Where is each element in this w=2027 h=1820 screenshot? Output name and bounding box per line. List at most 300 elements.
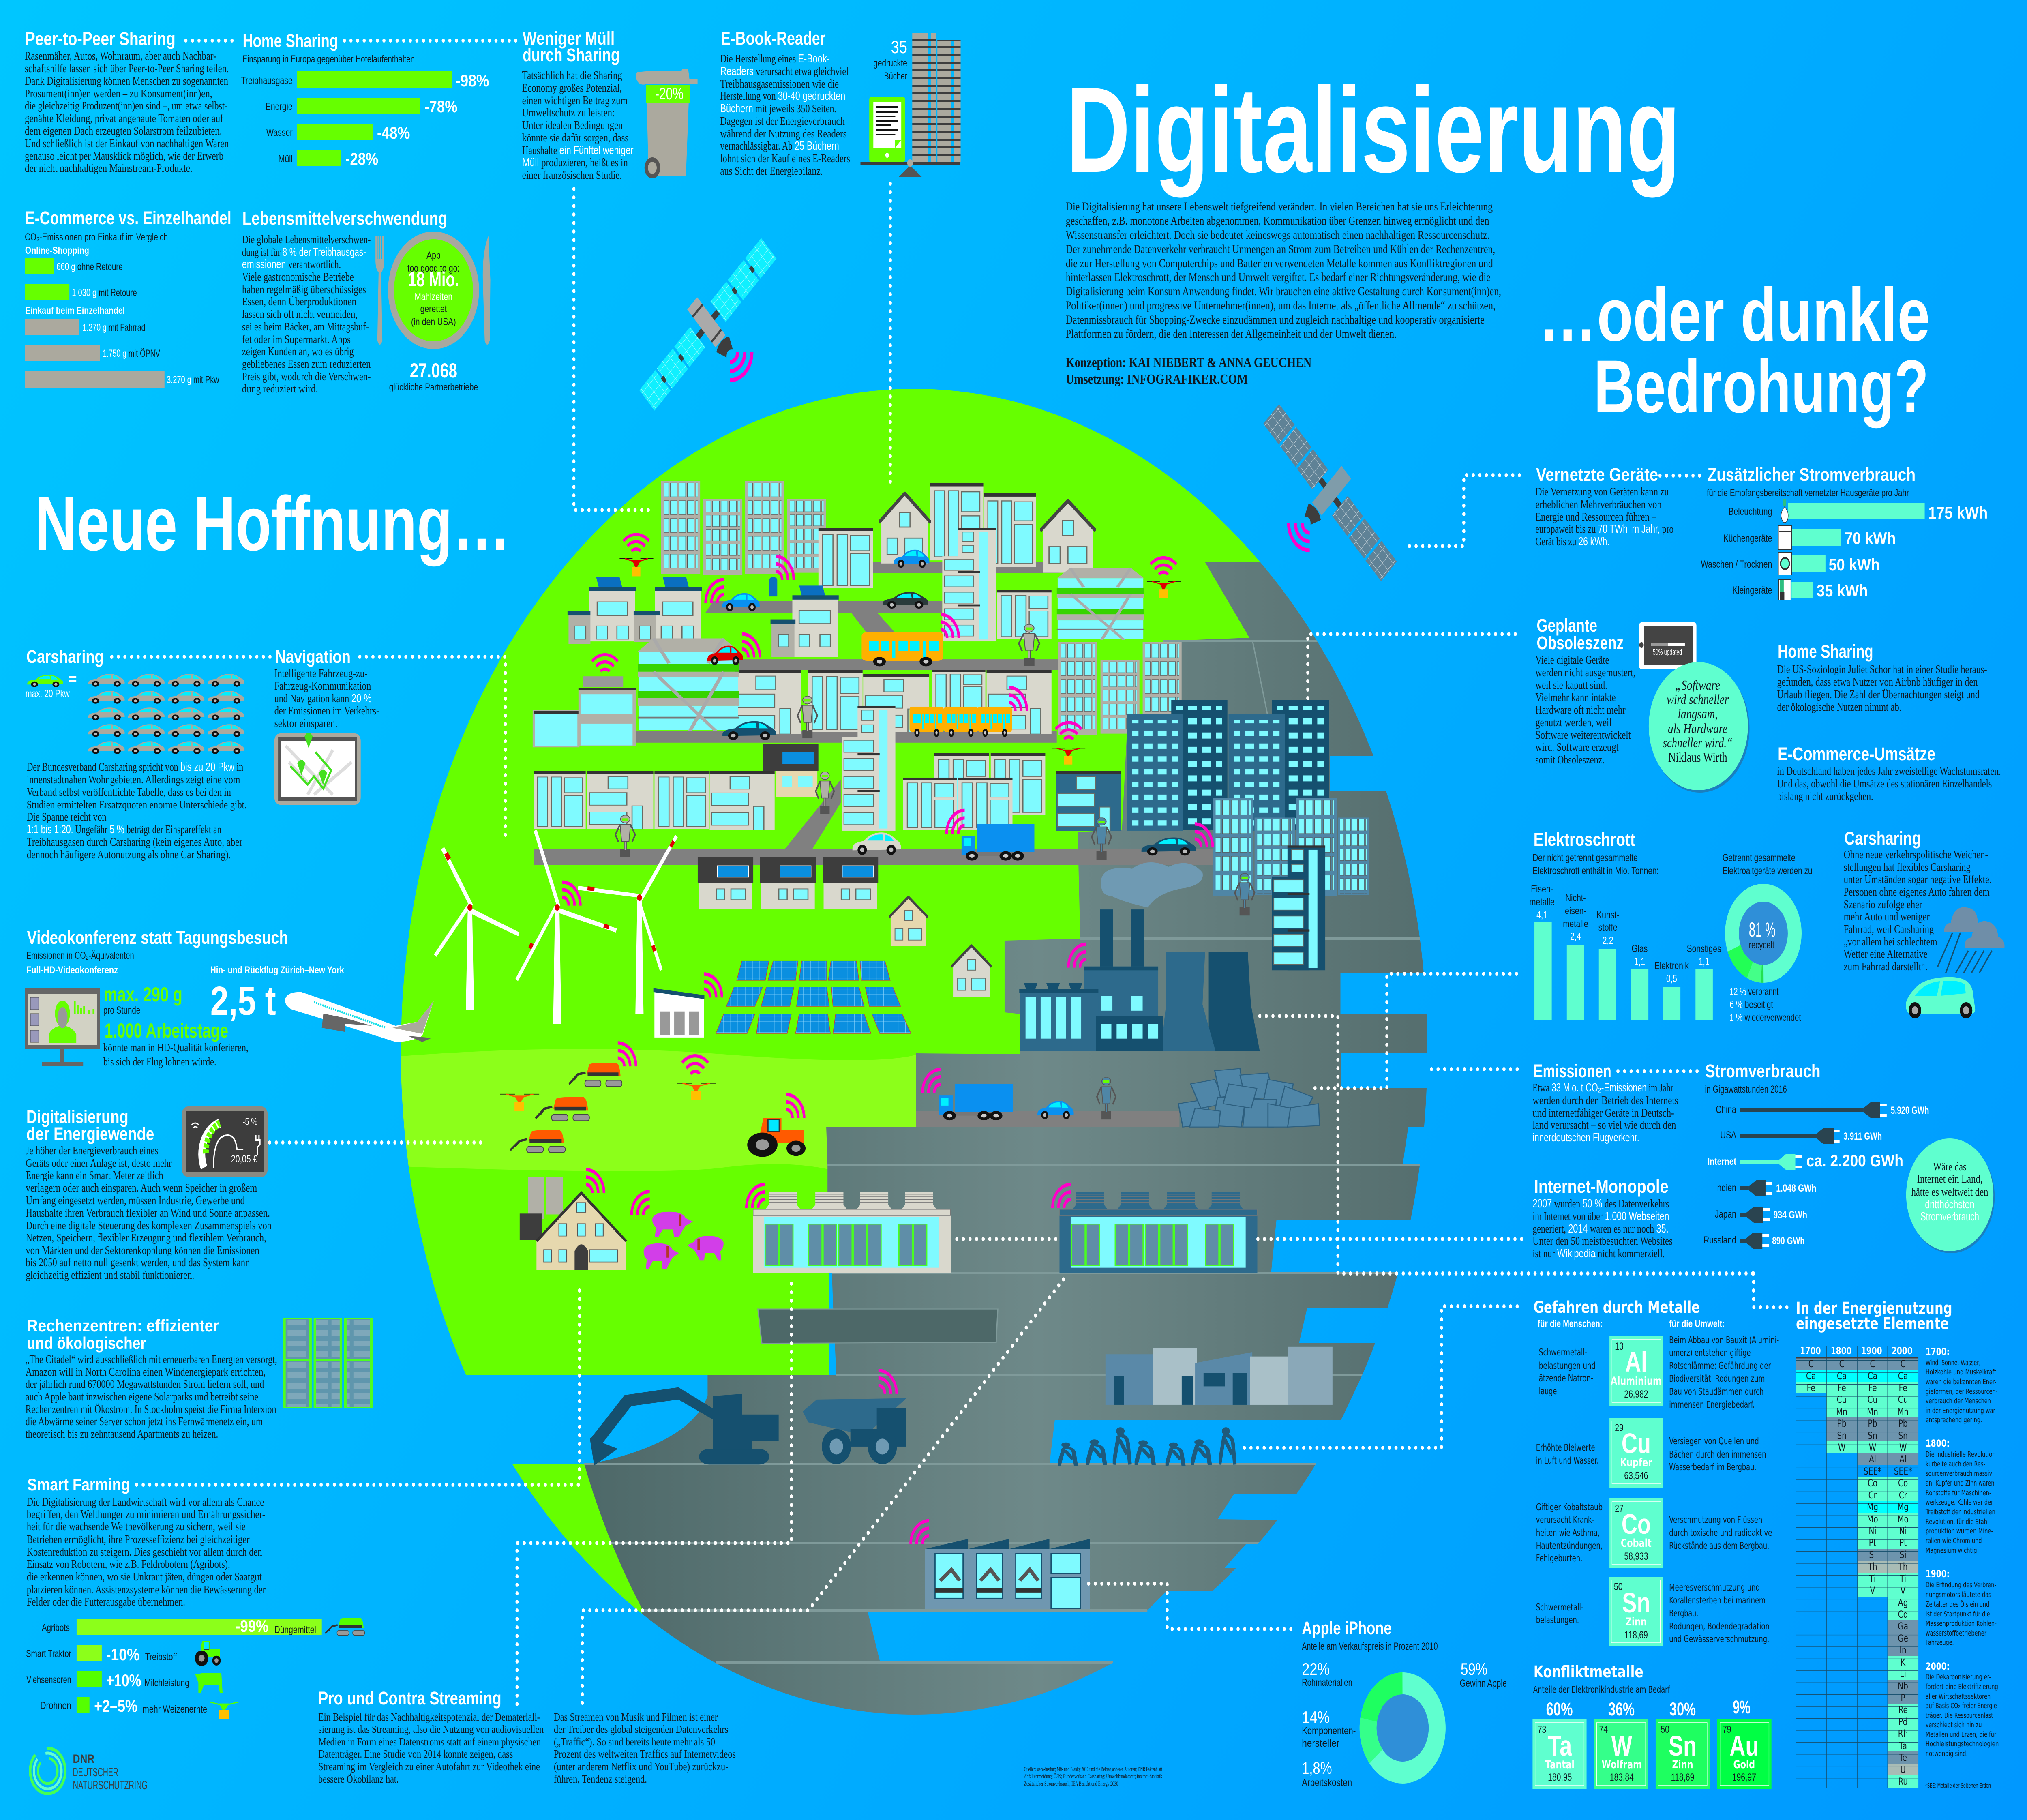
text: era descriptions: Revolution, für die Stahl- xyxy=(1926,1517,1991,1526)
body text: Und das, obwohl die Umsätze des stationären Einzelhandels xyxy=(1777,777,1992,790)
panel: Apple iPhone xyxy=(1302,1618,1507,1788)
table: elements by era: Sn xyxy=(1898,1430,1908,1442)
subtitle: Der nicht getrennt gesammelte xyxy=(1532,852,1638,864)
body text: Müll produzieren, heißt es in xyxy=(522,156,628,169)
text: hazards for environment: Bächen durch den immensen xyxy=(1669,1449,1766,1460)
element cards xyxy=(1609,1336,1663,1646)
body text: auch Apple baut inzwischen eigene Solarparks und betreibt seine xyxy=(26,1391,258,1403)
bar chart: e-waste: 4,1 xyxy=(1536,909,1547,921)
table: elements by era: Pb xyxy=(1837,1418,1847,1430)
bar chart: Energie xyxy=(266,101,293,112)
body text: Haushalte ihren Verbrauch flexibler an Wind und Sonne anpassen. xyxy=(26,1207,270,1220)
body text: dung reduziert wird. xyxy=(242,382,318,395)
text: era descriptions: Hochleistungstechnologien xyxy=(1926,1739,1999,1748)
body text: theoretisch bis zu zehntausend Apartments zu heizen. xyxy=(26,1428,218,1441)
bar chart: emissions xyxy=(25,245,219,388)
text: era descriptions: Fahrzeuge. xyxy=(1926,1638,1954,1646)
chart: electricity cables and plugs: 5.920 GWh xyxy=(1891,1105,1929,1116)
callout: Niklaus Wirth quote: wird schneller xyxy=(1667,692,1729,707)
text: hazards for humans: heiten wie Asthma, xyxy=(1536,1527,1600,1538)
subtitle: CO₂-Emissionen pro Einkauf im Vergleich xyxy=(25,232,168,243)
text: hazards for environment: Meeresverschmutzung und xyxy=(1669,1582,1760,1593)
chart: electricity cables and plugs: Internet xyxy=(1708,1156,1736,1167)
heading: der Energiewende xyxy=(26,1124,154,1144)
heading: Carsharing xyxy=(26,647,104,667)
bar chart: farming savings: +10% xyxy=(106,1671,141,1690)
body text: gebliebenes Essen zum reduzierten xyxy=(242,357,371,371)
text: hazards for environment: Wasserbedarf im Bergbau. xyxy=(1669,1462,1757,1473)
body text: Rechenzentren mit Ökostrom. In Stockholm speist die Firma Interxion xyxy=(26,1404,276,1416)
text: hazards for humans xyxy=(1536,1347,1603,1625)
body text: lohnt sich der Kauf eines E-Readers xyxy=(720,152,850,165)
donut chart: recycling: Getrennt gesammelte xyxy=(1723,852,1796,864)
heading: E-Book-Reader xyxy=(721,28,826,49)
drones xyxy=(619,558,1181,765)
body text: Haushalte ein Fünftel weniger xyxy=(522,144,634,157)
icon: smart meter: 20,05 € xyxy=(231,1153,257,1165)
heading: Navigation xyxy=(275,647,351,667)
icon: one shared car equals twenty cars xyxy=(26,674,244,754)
body text: Etwa 33 Mio. t CO₂-Emissionen im Jahr xyxy=(1532,1081,1673,1094)
body text right: („Traffic“). So sind bereits heute mehr als 50 xyxy=(554,1736,715,1748)
table: elements by era: Sn xyxy=(1868,1430,1877,1442)
callout: Internet as a country: hätte es weltweit den xyxy=(1911,1185,1988,1198)
element cards: 180,95 xyxy=(1548,1772,1572,1783)
table: elements by era: 1800 xyxy=(1831,1346,1851,1357)
body text xyxy=(242,233,371,395)
body text: Die Vernetzung von Geräten kann zu xyxy=(1535,485,1669,498)
callout: Internet as a country: Wäre das xyxy=(1933,1160,1967,1173)
labels: iPhone price shares: Arbeitskosten xyxy=(1302,1777,1352,1788)
icon: balance with reader and books: 35 xyxy=(891,37,907,57)
text: hazards for environment: und Gewässerverschmutzung. xyxy=(1669,1633,1769,1644)
bar chart: farming savings xyxy=(26,1616,322,1715)
element cards: 118,69 xyxy=(1671,1772,1694,1783)
table: elements by era: Si xyxy=(1900,1550,1907,1561)
bar chart xyxy=(241,71,489,168)
callout: Internet as a country: Internet ein Land, xyxy=(1917,1172,1982,1185)
automated factory xyxy=(925,1539,1090,1609)
panel: Carsharing left xyxy=(26,647,247,861)
city and energy scene xyxy=(534,481,1369,1051)
element cards: Sn xyxy=(1622,1587,1650,1619)
tan house with dark roof xyxy=(763,744,819,797)
bar chart: e-waste: 1,1 xyxy=(1699,956,1710,967)
bar chart: Küchengeräte xyxy=(1723,533,1772,544)
callout: Niklaus Wirth quote: langsam, xyxy=(1678,706,1718,722)
icons: appliances xyxy=(1778,499,1791,600)
body text: Preis gibt, wodurch die Verschwen- xyxy=(242,370,371,383)
heading: Lebensmittelverschwendung xyxy=(242,208,447,229)
body text: wird. Software erzeugt xyxy=(1535,740,1619,754)
labels: iPhone price shares: Rohmaterialien xyxy=(1302,1677,1352,1688)
intro text: Digitalisierung beim Konsum Anwendung findet. Wir brauchen eine aktive Gestaltung durch Konsument(inn)en, xyxy=(1066,284,1501,298)
table: elements by era: Al xyxy=(1899,1454,1907,1465)
cube houses with solar roofs xyxy=(568,577,839,657)
text: hazards for humans: Fehlgeburten. xyxy=(1536,1553,1583,1564)
body text: begriffen, den Welthunger zu minimieren und Ernährungssicher- xyxy=(27,1509,265,1521)
body text xyxy=(1535,485,1673,548)
text: era descriptions: aller Wirtschaftssektoren xyxy=(1926,1692,1991,1700)
body text: werden nicht ausgemustert, xyxy=(1535,666,1635,679)
body text: Der Bundesverband Carsharing spricht von bis zu 20 Pkw in xyxy=(27,760,243,774)
body text: Büchern mit jeweils 350 Seiten. xyxy=(720,102,836,115)
body text: Die Spanne reicht von xyxy=(27,810,107,823)
body text: Prosument(inn)en werden – zu Konsument(inn)en, xyxy=(25,87,212,100)
body text: Treibhausgasen durch Carsharing (kein eigenes Auto, aber xyxy=(27,835,242,849)
subtitle: Einsparung in Europa gegenüber Hotelaufenthalten xyxy=(242,54,415,65)
labels: iPhone price shares xyxy=(1302,1659,1507,1788)
body text: und Navigation kann 20 % xyxy=(274,692,372,705)
globe illustration xyxy=(401,389,1427,1715)
body text xyxy=(1777,764,2001,803)
body text left: Datenträger. Eine Studie von 2014 konnte zeigen, dass xyxy=(318,1748,513,1760)
text: hazards for environment: Rodungen, Bodendegradation xyxy=(1669,1621,1770,1632)
video conference comparison: 1.000 Arbeitstage xyxy=(105,1020,228,1042)
dark data centre xyxy=(1059,1192,1258,1273)
element cards: Kupfer xyxy=(1620,1456,1652,1469)
heading: Apple iPhone xyxy=(1302,1618,1392,1638)
tractor xyxy=(747,1118,806,1157)
bar chart: farming savings: Drohnen xyxy=(40,1700,71,1711)
body text: Urlaub fliegen. Die Zahl der Übernachtungen steigt und xyxy=(1777,688,1980,701)
element cards xyxy=(1532,1719,1772,1789)
body text: Unter den 50 meistbesuchten Websites xyxy=(1532,1234,1673,1248)
bar chart: farming savings: Düngemittel xyxy=(274,1624,316,1636)
element cards: Gold xyxy=(1733,1758,1755,1771)
icon: rain clouds xyxy=(1937,907,2005,973)
element cards: Cu xyxy=(1622,1428,1651,1460)
dotted connector lines xyxy=(112,41,1793,1704)
bar chart: farming savings: -10% xyxy=(106,1645,140,1664)
body text: weil sie kaputt sind. xyxy=(1535,678,1607,692)
heading xyxy=(26,1107,154,1144)
table: elements by era: Mg xyxy=(1897,1502,1909,1513)
body text left xyxy=(318,1711,544,1786)
heading: eingesetzte Elemente xyxy=(1796,1314,1949,1333)
body text left: bessere Ökobilanz hat. xyxy=(318,1773,399,1786)
body text: Kostenreduktion zu steigern. Dies geschieht vor allem durch den xyxy=(27,1546,262,1558)
text: hazards for humans: Hautentzündungen, xyxy=(1536,1540,1603,1551)
element cards: 13 xyxy=(1615,1341,1624,1352)
text: hazards for humans: belastungen. xyxy=(1536,1614,1579,1625)
table: elements by era: Th xyxy=(1868,1561,1877,1573)
chart: electricity cables and plugs xyxy=(1703,1102,1929,1249)
subtitle xyxy=(1532,852,1659,877)
element cards: Au xyxy=(1729,1730,1759,1762)
body text: land verursacht – so viel wie durch den xyxy=(1532,1118,1676,1132)
video conference comparison: bis sich der Flug lohnen würde. xyxy=(103,1055,216,1068)
floating strata block xyxy=(758,1309,998,1343)
body text: Herstellung von 30-40 gedruckten xyxy=(720,89,845,103)
body text: 1:1 bis 1:20. Ungefähr 5 % beträgt der Einspareffekt an xyxy=(27,823,221,836)
body text: zeigen Kunden an, wo es übrig xyxy=(242,345,354,358)
donut chart: recycling: recycelt xyxy=(1749,939,1774,951)
text: era descriptions: 1700: xyxy=(1926,1346,1950,1358)
table: elements by era: 1900 xyxy=(1861,1346,1882,1357)
bar chart: farming savings: Treibstoff xyxy=(145,1651,177,1663)
subtitle: Anteile der Elektronikindustrie am Bedarf xyxy=(1533,1684,1670,1695)
road with truck, car and robot xyxy=(916,1077,1179,1127)
table: elements by era: U xyxy=(1900,1764,1906,1776)
labels: iPhone price shares: 22% xyxy=(1302,1659,1330,1679)
chart: electricity cables and plugs: Japan xyxy=(1715,1209,1736,1220)
panel: Home Sharing savings xyxy=(241,31,489,168)
body text: von Märkten und der Sektorenkopplung können die Emissionen xyxy=(26,1245,259,1257)
bar chart: farming savings: mehr Weizenernte xyxy=(143,1704,207,1715)
video conference comparison: max. 290 g xyxy=(104,984,182,1006)
table: elements by era: 1700 xyxy=(1800,1346,1821,1357)
percent values: 9% xyxy=(1733,1697,1751,1717)
main title: Digitalisierung xyxy=(1066,62,1680,199)
text: hazards for humans: Erhöhte Bleiwerte xyxy=(1536,1442,1595,1453)
table: elements by era: Fe xyxy=(1838,1383,1846,1394)
callout: Niklaus Wirth quote xyxy=(1649,662,1749,793)
body text: Ohne neue verkehrspolitische Weichen- xyxy=(1844,848,1988,861)
shanty houses xyxy=(1106,1347,1333,1405)
subtitle: in Gigawattstunden 2016 xyxy=(1705,1084,1787,1095)
table: elements by era: Mn xyxy=(1867,1406,1878,1418)
table: elements by era: C xyxy=(1901,1359,1906,1370)
text: hazards for humans: belastungen und xyxy=(1539,1360,1596,1371)
bar chart: farming savings: Smart Traktor xyxy=(26,1648,71,1659)
bar chart: e-waste: eisen- xyxy=(1565,905,1586,917)
table: elements by era: C xyxy=(1839,1359,1845,1370)
intro text: Datenmissbrauch für Shopping-Zwecke einzudämmen und zugleich nachhaltige und kooperativ organisierte xyxy=(1066,313,1485,326)
bar chart: e-waste: 2,4 xyxy=(1570,931,1581,942)
text: hazards for environment: Versiegen von Quellen und xyxy=(1669,1436,1759,1447)
icon: plate with cutlery: gerettet xyxy=(420,303,447,315)
row of houses with roofs xyxy=(698,857,992,997)
bar chart: e-waste: Kunst- xyxy=(1596,909,1619,921)
body text: Geräts oder einer Anlage ist, desto mehr xyxy=(26,1158,172,1170)
body text xyxy=(25,49,229,175)
panel: Konfliktmetalle xyxy=(1532,1663,1772,1789)
donut chart: recycling: 6 % beseitigt xyxy=(1730,999,1773,1010)
element cards: 27 xyxy=(1615,1503,1624,1514)
heading: Internet-Monopole xyxy=(1534,1177,1669,1197)
text: hazards for environment: Bergbau. xyxy=(1669,1608,1698,1619)
labels: iPhone price shares: 14% xyxy=(1302,1708,1330,1727)
element cards: 183,84 xyxy=(1610,1772,1634,1783)
bar chart: farming savings: Agribots xyxy=(42,1622,70,1633)
text: hazards for environment: Beim Abbau von Bauxit (Alumini- xyxy=(1669,1335,1779,1346)
subtitle: Elektroschrott enthält in Mio. Tonnen: xyxy=(1532,865,1659,877)
heading: Konfliktmetalle xyxy=(1534,1663,1643,1681)
body text: fet oder im Supermarkt. Apps xyxy=(242,332,351,346)
source notes: Abfallvermeidung; Ö3N; Bundesverband Carsharing; Umweltbundesamt; Internet-Statistik xyxy=(1024,1773,1162,1779)
donut chart: recycling: 1 % wiederverwendet xyxy=(1730,1012,1801,1023)
bar chart: emissions: Einkauf beim Einzelhandel xyxy=(25,305,125,316)
bar chart: emissions: 1.030 g mit Retoure xyxy=(72,287,137,298)
element cards: 74 xyxy=(1599,1724,1608,1735)
bar chart: emissions: 3.270 g mit Pkw xyxy=(167,374,219,386)
electronic waste pile xyxy=(1178,1069,1320,1127)
wind turbines xyxy=(434,830,678,1024)
text: era descriptions: verschiebt sich hin zu xyxy=(1926,1720,1982,1729)
body text: Je höher der Energieverbrauch eines xyxy=(26,1145,158,1157)
body text: gleichzeitig effizient und stabil funktionieren. xyxy=(26,1269,194,1282)
heading: Weniger Müll xyxy=(523,28,615,49)
body text: während der Nutzung des Readers xyxy=(720,127,846,140)
icon: waste bin -20%: -20% xyxy=(655,84,684,103)
heading: Home Sharing xyxy=(243,31,338,51)
heading xyxy=(27,1316,219,1353)
icon: navigation tablet xyxy=(274,733,361,805)
text: era descriptions: Rohstoffe für Maschinen- xyxy=(1926,1488,1991,1497)
icon: smart meter: -5 % xyxy=(243,1116,257,1128)
heading: Elektroschrott xyxy=(1534,830,1635,850)
fossil power plant xyxy=(1019,862,1260,1051)
text: era descriptions: notwendig sind. xyxy=(1926,1749,1968,1758)
labels: iPhone price shares: 59% xyxy=(1461,1659,1487,1679)
heading: Carsharing xyxy=(1844,828,1921,849)
table: elements by era: Fe xyxy=(1899,1383,1907,1394)
body text: der nicht nachhaltigen Mainstream-Produkte. xyxy=(25,161,193,175)
table: elements by era: W xyxy=(1838,1442,1845,1453)
body text: generiert, 2014 waren es nur noch 35. xyxy=(1532,1222,1669,1235)
body text: heit für die wachsende Weltbevölkerung zu sichern, weil sie xyxy=(27,1521,246,1533)
body text: schaftshilfe lassen sich über Peer-to-Peer Sharing teilen. xyxy=(25,62,229,75)
body text xyxy=(26,1145,272,1282)
bar chart: Wasser xyxy=(266,127,293,138)
body text: Die globale Lebensmittelverschwen- xyxy=(242,233,371,246)
text: era descriptions: *SEE: Metalle der Seltenen Erden xyxy=(1925,1783,1991,1789)
body text xyxy=(27,1496,266,1608)
element cards: 50 xyxy=(1661,1724,1669,1735)
green data centre xyxy=(753,1192,951,1273)
farm drones xyxy=(500,1083,716,1111)
body text left: Ein Beispiel für das Nachhaltigkeitspotenzial der Demateriali- xyxy=(318,1711,540,1724)
body text: genauso leicht per Mausklick möglich, wie der Erwerb xyxy=(25,149,223,163)
bar chart: -48% xyxy=(377,123,410,142)
text: era descriptions: verbrauch der Menschen xyxy=(1926,1396,1991,1405)
icon: plate with cutlery: App xyxy=(426,250,441,261)
bar chart: -98% xyxy=(456,71,489,90)
icon: airplane xyxy=(285,992,434,1042)
text: hazards for environment xyxy=(1669,1335,1779,1644)
body text: ist nur Wikipedia nicht kommerziell. xyxy=(1532,1247,1665,1260)
lower scene: farming, data centres, mining xyxy=(500,1043,1333,1609)
icon: waste bin -20% xyxy=(636,69,698,178)
text: era descriptions: gieformen, der Ressourcen- xyxy=(1926,1387,1997,1396)
body text right: führen, Tendenz steigend. xyxy=(554,1773,647,1786)
panel: Internet-Monopole xyxy=(1532,1177,1673,1260)
table: elements by era: Mg xyxy=(1867,1502,1878,1513)
table: elements by era: Mo xyxy=(1867,1514,1878,1525)
donut chart: recycling: 81 % xyxy=(1749,919,1776,941)
table: elements by era: Ca xyxy=(1837,1371,1847,1382)
body text xyxy=(1535,653,1635,766)
body text: Amazon will in North Carolina einen Windenergiepark errichten, xyxy=(26,1366,266,1378)
icon: shared car in rain xyxy=(1906,977,1975,1018)
text: era descriptions: Zeitalter des Öls ein und xyxy=(1926,1600,1989,1608)
body text: dennoch häufigere Autonutzung als ohne Car Sharing). xyxy=(27,848,231,861)
text: hazards for humans: verursacht Krank- xyxy=(1536,1514,1594,1525)
text: era descriptions: ralien wie Chrom und xyxy=(1926,1536,1982,1545)
text: hazards for humans: Schwermetall- xyxy=(1539,1347,1587,1358)
text: era descriptions: waren die bekannten Ener- xyxy=(1926,1377,1996,1386)
body text: stellungen hat flexibles Carsharing xyxy=(1844,860,1971,874)
icon: plate with cutlery: 18 Mio. xyxy=(408,268,459,291)
text: hazards for environment: Bau von Staudämmen durch xyxy=(1669,1386,1763,1397)
text: hazards for humans: ätzende Natron- xyxy=(1539,1373,1593,1384)
table: elements by era: Ru xyxy=(1898,1776,1908,1788)
table: elements by era: Fe xyxy=(1868,1383,1877,1394)
intro text: geschaffen, z.B. monotone Arbeiten abgenommen, Kommunikation über Grenzen hinweg ermöglicht und den xyxy=(1066,214,1489,227)
heading xyxy=(523,28,620,65)
panel: Lebensmittelverschwendung xyxy=(242,208,491,395)
body text: bis 2050 auf netto null gesenkt werden, und das System kann xyxy=(26,1257,250,1269)
heading: Videokonferenz statt Tagungsbesuch xyxy=(27,928,288,948)
element cards: Co xyxy=(1622,1508,1651,1540)
substation xyxy=(654,988,705,1038)
panel: Home Sharing right xyxy=(1777,641,1987,714)
text: era descriptions: Treibstoff der industriellen xyxy=(1925,1507,1995,1516)
table: elements by era: Mn xyxy=(1897,1406,1909,1418)
text: era descriptions: in der Energienutzung war xyxy=(1926,1406,1995,1415)
text: era descriptions: 2000: xyxy=(1926,1661,1950,1672)
panel: Navigation xyxy=(274,647,379,805)
icon: smart meter xyxy=(182,1106,268,1177)
body text: „vor allem bei schlechtem xyxy=(1844,935,1937,948)
element cards: 29 xyxy=(1615,1422,1624,1434)
callout: Niklaus Wirth quote: Niklaus Wirth xyxy=(1668,750,1727,765)
pigs xyxy=(644,1212,724,1269)
table: elements by era: Ti xyxy=(1899,1573,1906,1585)
heading xyxy=(1796,1299,1952,1333)
text: era descriptions: Die Dekarbonisierung er- xyxy=(1926,1672,1991,1681)
element cards: W xyxy=(1611,1730,1633,1762)
bar chart: emissions: Online-Shopping xyxy=(25,245,89,256)
body text: die erkennen können, wo sie Unkraut jäten, düngen oder Saatgut xyxy=(27,1571,262,1583)
chart: electricity cables and plugs: Russland xyxy=(1703,1235,1736,1246)
subtitle: für die Empfangsbereitschaft vernetzter Hausgeräte pro Jahr xyxy=(1707,487,1909,499)
text: hazards for humans: in Luft und Wasser. xyxy=(1536,1455,1599,1466)
text: era descriptions: nungsmotors läutete das xyxy=(1926,1590,1991,1599)
residential buildings xyxy=(534,483,1096,831)
panel: E-Commerce vs. Einzelhandel xyxy=(25,208,231,388)
text: era descriptions: sourcenverbrauch massiv xyxy=(1926,1469,1992,1477)
satellite right xyxy=(1249,394,1405,600)
logo: DNR Deutscher Naturschutzring: DNR xyxy=(73,1752,94,1766)
body text: Die Digitalisierung der Landwirtschaft wird vor allem als Chance xyxy=(27,1496,264,1509)
heading: Stromverbrauch xyxy=(1705,1061,1820,1081)
source notes: Zusätzlicher Stromverbrauch, IEA Bericht und Energy 2030 xyxy=(1024,1780,1118,1787)
text: era descriptions: Die industrielle Revolution xyxy=(1926,1450,1996,1458)
body text left: sierung ist das Streaming, also die Nutzung von audiovisuellen xyxy=(318,1724,544,1736)
element cards: 50 xyxy=(1614,1581,1622,1593)
text: hazards for humans: Giftiger Kobaltstaub xyxy=(1536,1502,1603,1513)
body text: europaweit bis zu 70 TWh im Jahr, pro xyxy=(1535,522,1673,536)
intro text: Die Digitalisierung hat unsere Lebenswelt tiefgreifend verändert. In vielen Bereichen hat sie uns Erleichterung xyxy=(1066,199,1493,213)
body text: emissionen verantwortlich. xyxy=(242,257,341,271)
body text: 2007 wurden 50 % des Datenverkehrs xyxy=(1532,1197,1669,1210)
body text: vernachlässigbar. Ab 25 Büchern xyxy=(720,139,839,152)
text: hazards for environment: Rotschlämme; Gefährdung der xyxy=(1669,1360,1771,1371)
bar chart: 70 kWh xyxy=(1845,529,1896,548)
callout: Niklaus Wirth quote: „Software xyxy=(1675,677,1720,693)
element cards: 26,982 xyxy=(1624,1389,1648,1400)
element cards: 58,933 xyxy=(1624,1551,1648,1562)
body text: der jährlich rund 670000 Megawattstunden Strom liefern soll, und xyxy=(26,1378,264,1391)
table: elements by era: W xyxy=(1899,1442,1907,1453)
labels: iPhone price shares: Gewinn Apple xyxy=(1460,1678,1507,1689)
table: elements by era: V xyxy=(1901,1585,1906,1597)
body text: Economy großes Potenzial, xyxy=(522,81,622,94)
table: elements by era: Te xyxy=(1898,1752,1907,1764)
body text: dem eigenen Dach erzeugten Solarstrom feilzubieten. xyxy=(25,124,222,137)
